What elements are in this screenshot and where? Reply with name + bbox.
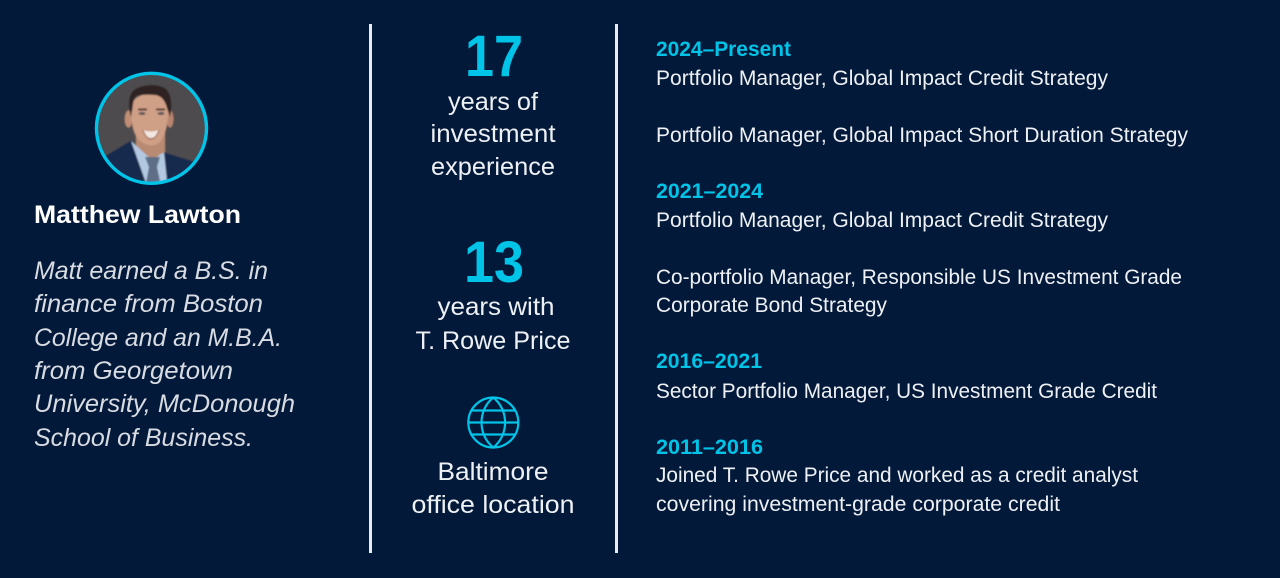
stat: years with firm: years with	[438, 293, 554, 321]
role period: 2016 to 2021: Sector Portfolio Manager, US Investment Grade Credit	[656, 379, 1157, 403]
mouth	[143, 130, 159, 138]
biography	[34, 257, 295, 452]
hair	[129, 85, 171, 117]
role period: 2024 to present	[656, 37, 1188, 147]
panel: key facts	[412, 24, 574, 519]
role period: 2011 to 2016: covering investment-grade corporate credit	[656, 492, 1060, 516]
stat: years of experience: experience	[431, 153, 555, 181]
role period: 2021 to 2024: Co-portfolio Manager, Responsible US Investment Grade	[656, 265, 1182, 289]
role period: 2021 to 2024	[656, 179, 1182, 317]
portrait photo	[94, 72, 208, 185]
role period: 2024 to present: Portfolio Manager, Global Impact Credit Strategy	[656, 66, 1108, 90]
office location	[412, 458, 574, 519]
biography: finance from Boston	[34, 290, 263, 318]
shirt	[131, 141, 167, 183]
role period: 2021 to 2024: Portfolio Manager, Global Impact Credit Strategy	[656, 208, 1108, 232]
stat: years of experience: years of	[448, 88, 538, 116]
stat: years with firm: 13	[464, 230, 524, 295]
biography: School of Business.	[34, 424, 253, 452]
neck	[136, 132, 165, 160]
biography: University, McDonough	[34, 390, 295, 418]
role period: 2011 to 2016	[656, 435, 1138, 516]
ears	[125, 110, 132, 128]
stat: years of experience: investment	[430, 120, 556, 148]
face	[131, 94, 169, 145]
role period: 2016 to 2021	[656, 349, 1157, 403]
role period: 2016 to 2021: 2016–2021	[656, 349, 762, 373]
stat: years with firm: T. Rowe Price	[416, 327, 570, 355]
biography: from Georgetown	[34, 357, 233, 385]
role period: 2024 to present: Portfolio Manager, Global Impact Short Duration Strategy	[656, 123, 1188, 147]
eyes	[138, 108, 147, 110]
role period: 2021 to 2024: 2021–2024	[656, 179, 763, 203]
panel: profile	[34, 70, 295, 452]
tie	[145, 157, 160, 183]
stat: years with firm	[416, 230, 570, 355]
biography: Matt earned a B.S. in	[34, 257, 268, 285]
panel: career timeline	[656, 37, 1188, 516]
role period: 2011 to 2016: Joined T. Rowe Price and worked as a credit analyst	[656, 463, 1138, 487]
office location: Baltimore	[438, 458, 548, 486]
stat: years of experience	[430, 24, 556, 181]
name: Matthew Lawton	[34, 201, 241, 229]
icon: globe	[468, 398, 518, 448]
stat: years of experience: 17	[465, 24, 523, 89]
role period: 2011 to 2016: 2011–2016	[656, 435, 763, 459]
role period: 2021 to 2024: Corporate Bond Strategy	[656, 293, 887, 317]
role period: 2024 to present: 2024–Present	[656, 37, 791, 61]
suit	[106, 140, 193, 181]
biography: College and an M.B.A.	[34, 324, 282, 352]
office location: office location	[412, 491, 574, 519]
